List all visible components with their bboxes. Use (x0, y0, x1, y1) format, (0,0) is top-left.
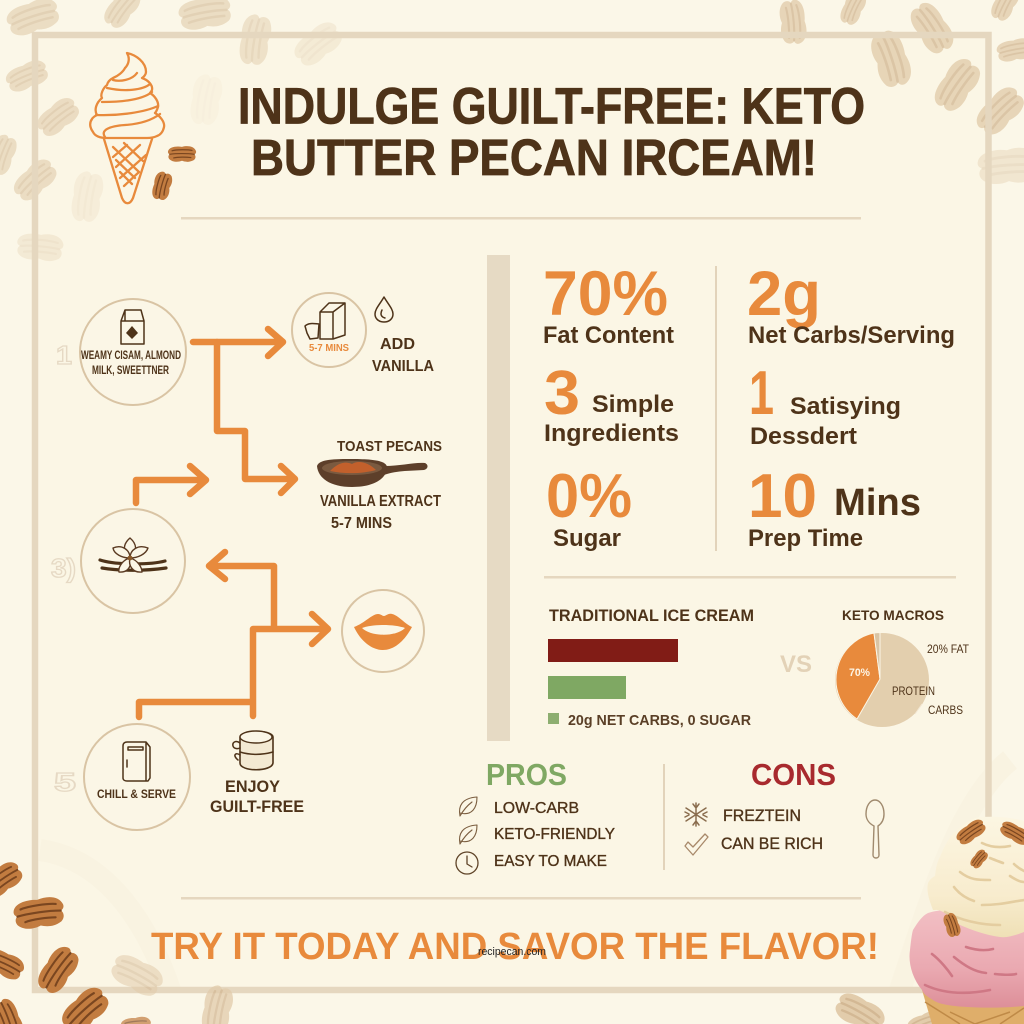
arrows: step 1 to add vanilla and toast pecans (193, 329, 295, 493)
label: toast pecans: TOAST PECANS (337, 438, 442, 455)
title: BUTTER PECAN IRCEAM! (251, 129, 817, 186)
arrow: to taste circle (139, 614, 328, 717)
bar: traditional (548, 639, 678, 662)
stat: 1 dessert: 1 (749, 359, 774, 428)
item: easy to make: EASY TO MAKE (494, 853, 607, 870)
stat: 2g net carbs: Net Carbs/Serving (748, 322, 955, 349)
title (238, 78, 865, 186)
heading: traditional ice cream: TRADITIONAL ICE CREAM (549, 606, 754, 625)
step 3 circle (81, 509, 185, 613)
pie labels: 20% FAT (927, 644, 969, 656)
arrow: step 3 up to flow (136, 466, 206, 503)
heading: keto macros: KETO MACROS (842, 607, 944, 623)
stat: 0% sugar: Sugar (553, 525, 621, 552)
pink scoop (910, 910, 1024, 1008)
step 5 circle: CHILL & SERVE (97, 789, 176, 801)
watermark: recipecan.com (478, 946, 546, 958)
label: add vanilla: VANILLA (372, 358, 434, 375)
step 4 circle: lips (342, 590, 424, 672)
icon: ice cream tub (233, 731, 273, 770)
panel: pros (456, 757, 615, 874)
stat: 10 mins (748, 462, 921, 552)
illustration: ice cream cone (910, 817, 1024, 1024)
pros cons divider (663, 764, 665, 870)
stat: 2g net carbs (747, 259, 955, 349)
label: vanilla extract (320, 493, 441, 532)
step 5 circle (84, 724, 190, 830)
stat: 1 dessert: Satisying (790, 393, 901, 420)
stat divider (715, 266, 717, 551)
vertical band (487, 255, 510, 741)
vs label: VS (780, 651, 812, 678)
heading: pros: PROS (486, 757, 567, 792)
stat: 0% sugar: 0% (546, 462, 632, 531)
icon: snowflake (685, 803, 707, 826)
legend: 20g NET CARBS, 0 SUGAR (568, 712, 751, 729)
step 2 circle (292, 293, 366, 367)
step 1 circle: MILK, SWEETTNER (92, 365, 169, 377)
step 1 circle: WEAMY CISAM, ALMOND (81, 350, 181, 362)
background swirl (40, 760, 1010, 990)
middle divider (544, 576, 956, 578)
item: keto-friendly: KETO-FRIENDLY (494, 826, 615, 843)
item: freztein: FREZTEIN (723, 806, 801, 825)
vanilla scoop (927, 817, 1024, 937)
panel: keto macros pie (834, 607, 969, 728)
stat: 2g net carbs: 2g (747, 259, 821, 329)
stat: 3 ingredients: Ingredients (544, 420, 679, 447)
pie labels: PROTEIN (892, 686, 935, 698)
pecans: bottom left (0, 858, 236, 1024)
stat: 3 ingredients: Simple (592, 391, 674, 418)
icon: leaf (460, 825, 477, 844)
title: INDULGE GUILT-FREE: KETO (238, 78, 865, 134)
cone (922, 990, 1024, 1024)
label: add vanilla (372, 336, 434, 375)
panel: key stats (543, 259, 955, 552)
label: vanilla extract: 5-7 MINS (331, 515, 392, 532)
top divider (181, 217, 861, 220)
panel: process flow (51, 293, 442, 830)
stat: 10 mins: 10 (748, 462, 817, 531)
stat: 1 dessert: Dessdert (750, 423, 857, 450)
stat: 1 dessert (749, 359, 901, 450)
panel: comparison bars (548, 606, 754, 729)
label: enjoy guilt-free: GUILT-FREE (210, 798, 304, 816)
step number 3: 3) (51, 553, 76, 583)
item: low-carb: LOW-CARB (494, 800, 579, 817)
step number 5: 5 (54, 767, 76, 797)
item: can be rich: CAN BE RICH (721, 834, 823, 853)
label: enjoy guilt-free: ENJOY (225, 778, 280, 796)
bar: keto (548, 676, 626, 699)
stat: 10 mins: Mins (834, 482, 921, 524)
step 2 circle: 5-7 MINS (309, 343, 349, 354)
pie labels: CARBS (928, 705, 963, 717)
faded pecans: top left (0, 0, 347, 262)
stat: 70% fat: 70% (543, 259, 668, 329)
icon: check (685, 834, 708, 855)
stat: 3 ingredients (544, 359, 679, 447)
faded pecans: top right (778, 0, 1024, 185)
bottom divider (181, 897, 861, 900)
scoop pecans (954, 817, 988, 847)
icon: leaf (460, 797, 477, 816)
stat: 70% fat: Fat Content (543, 322, 674, 349)
heading: cons: CONS (751, 757, 836, 792)
pie labels: 70% (849, 667, 870, 679)
call to action: TRY IT TODAY AND SAVOR THE FLAVOR! (151, 926, 879, 968)
icon: skillet (317, 459, 428, 487)
icon: pecans beside cone (150, 146, 196, 202)
icon: spoon (866, 800, 884, 858)
pie chart (834, 632, 930, 728)
step 1 circle (80, 299, 186, 405)
icon: clock (456, 852, 478, 874)
icon: vanilla drop (375, 297, 393, 322)
stat: 3 ingredients: 3 (544, 359, 580, 428)
label: enjoy guilt-free (210, 778, 304, 816)
arrow: to step 3 (209, 552, 274, 628)
label: vanilla extract: VANILLA EXTRACT (320, 493, 441, 510)
pecans: bottom right (831, 988, 945, 1024)
step number 1: 1 (56, 340, 72, 370)
panel: cons (685, 757, 884, 858)
stat: 10 mins: Prep Time (748, 525, 863, 552)
label: add vanilla: ADD (380, 336, 415, 353)
icon: soft serve cone (90, 53, 164, 203)
pie labels (849, 644, 969, 717)
